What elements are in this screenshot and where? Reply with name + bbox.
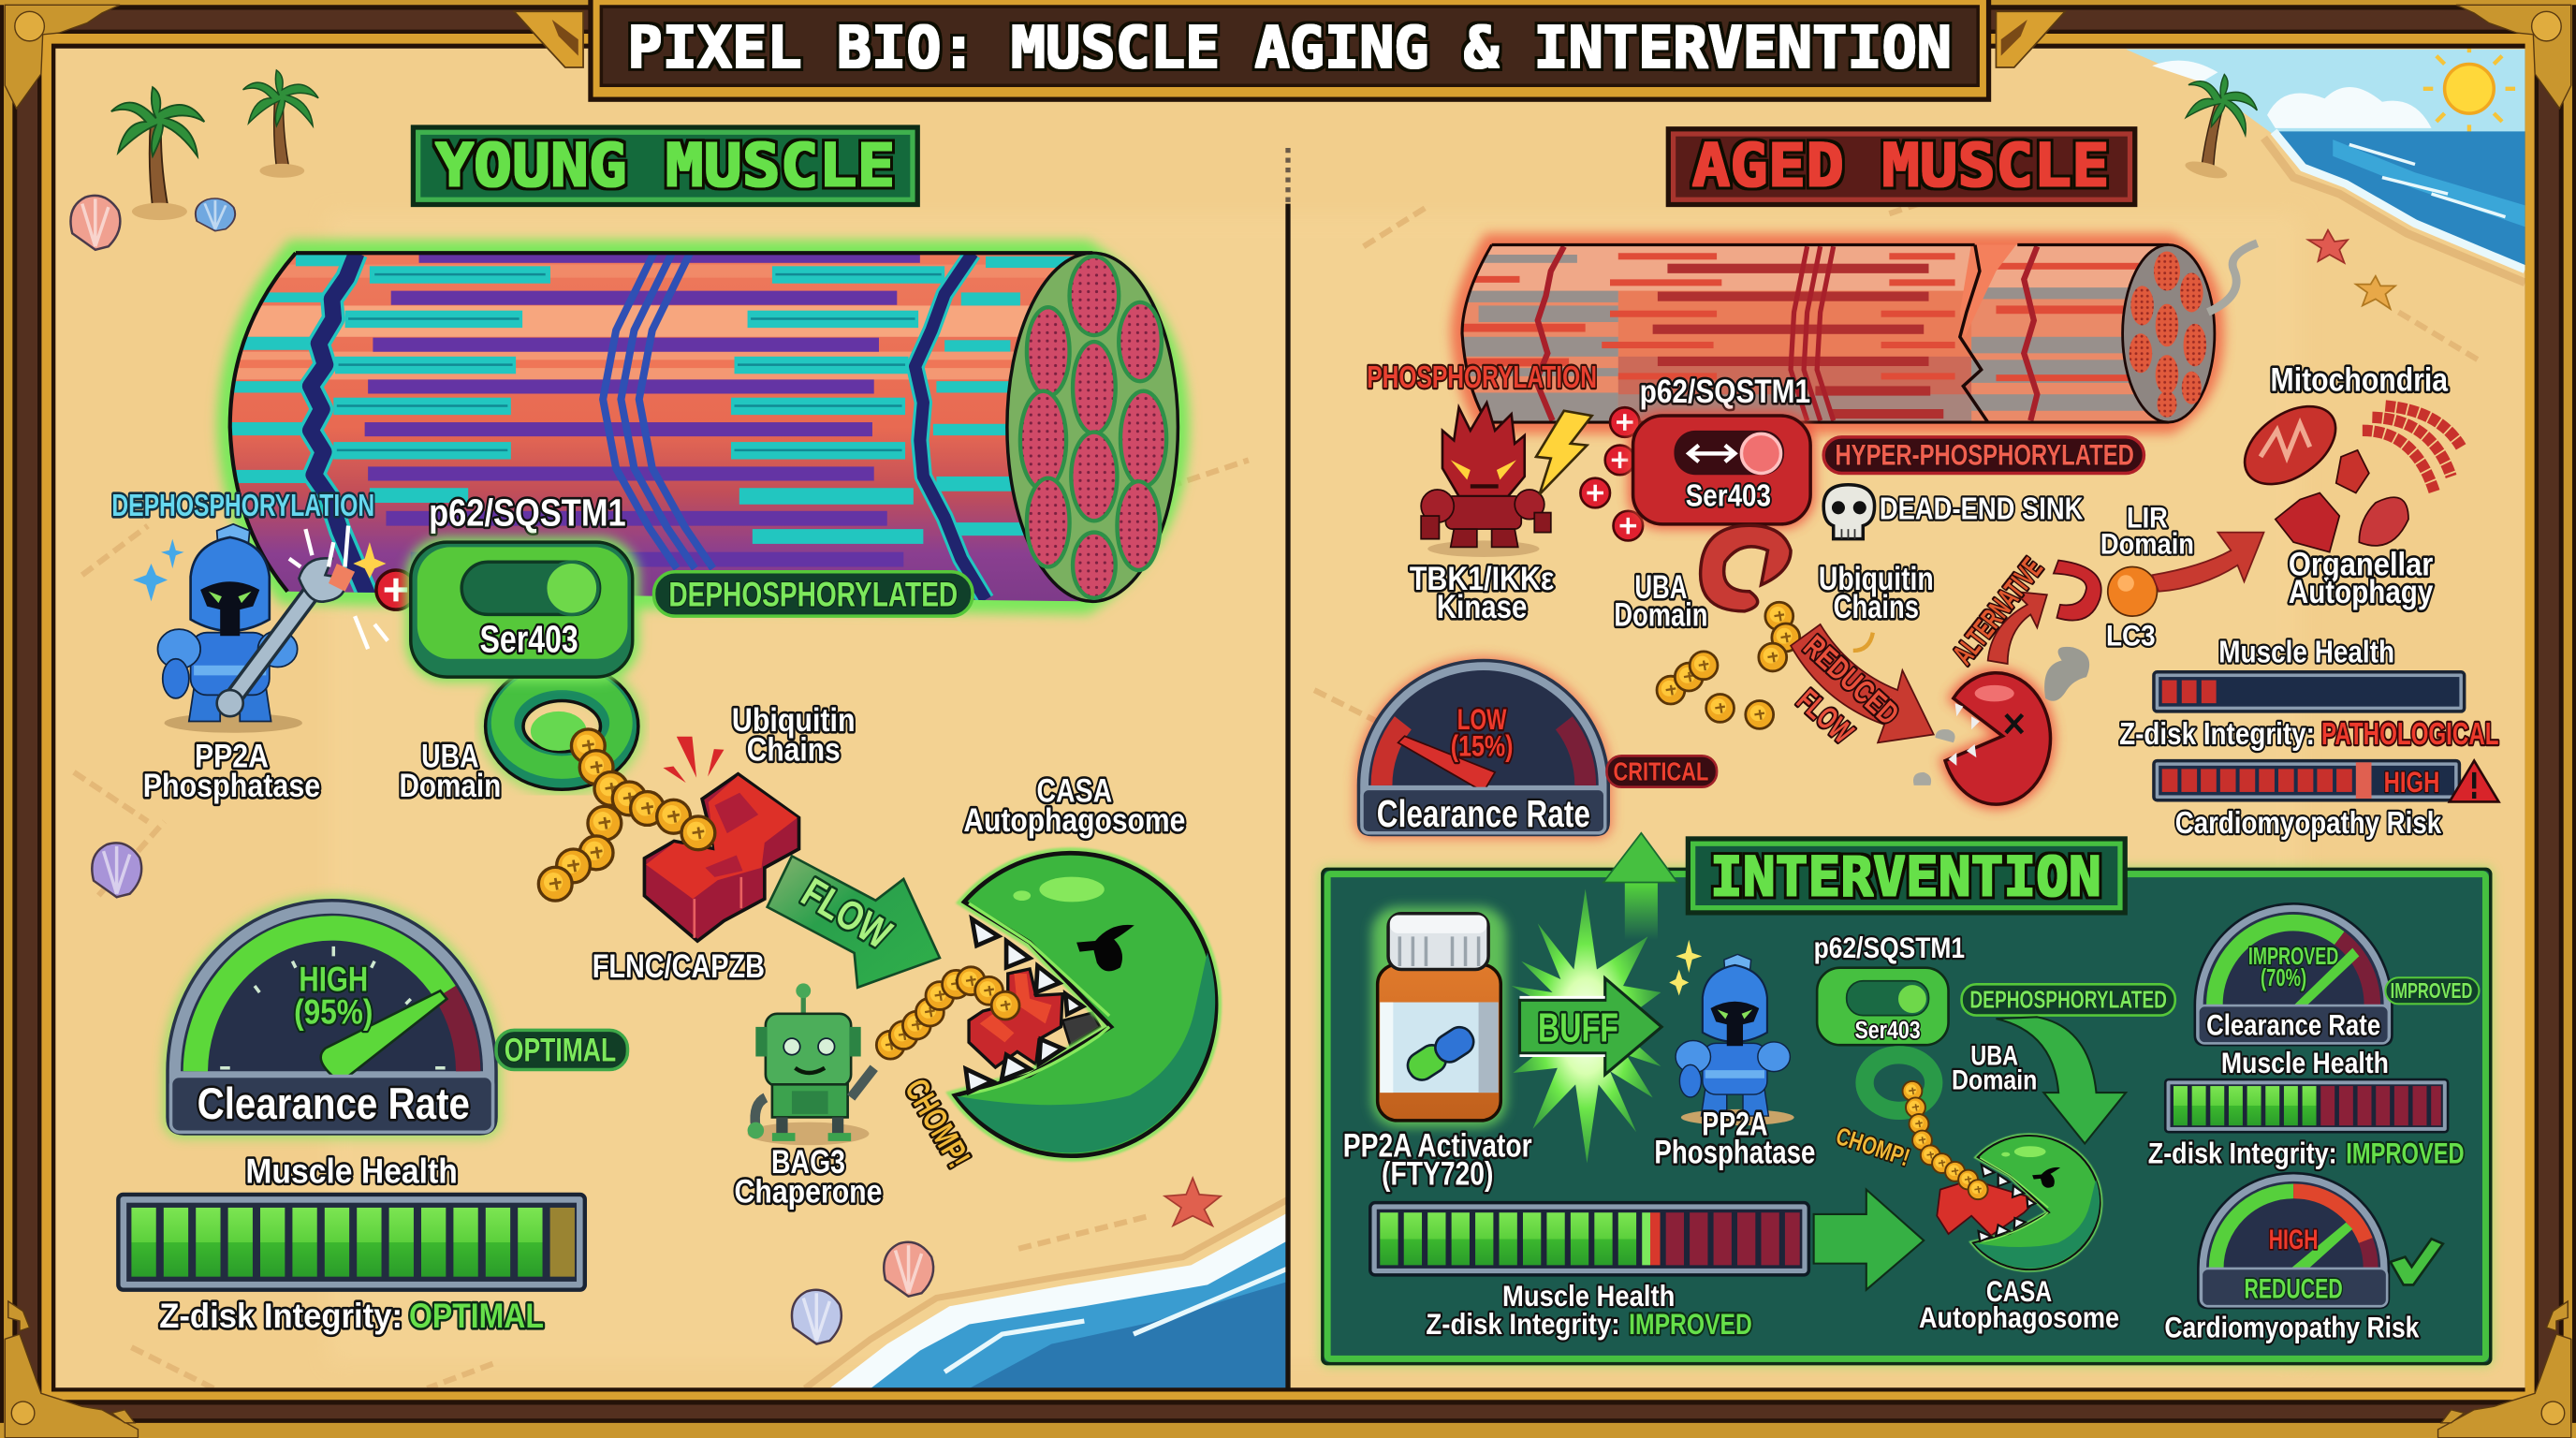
dead pac-man — [1913, 647, 2089, 804]
aged muscle fibre — [1454, 238, 2258, 427]
icon: TBK1 kinase monster — [1421, 403, 1592, 557]
label: organellar autophagy — [2289, 546, 2434, 610]
label: BAG3 chaperone: BAG3 — [771, 1144, 845, 1181]
pill: hyper-phosphorylated: HYPER-PHOSPHORYLATED — [1835, 438, 2134, 472]
UBA C-clamp — [1701, 525, 1791, 611]
sparkles — [133, 539, 184, 601]
label: z-disk integrity pathological: PATHOLOGICAL — [2321, 717, 2499, 752]
beach corner: sea bottom left — [805, 1199, 1288, 1388]
label: BAG3 chaperone: Chaperone — [735, 1174, 882, 1211]
arrow: alternative: ALTERNATIVE — [1946, 551, 2049, 670]
palm tree — [243, 70, 318, 178]
arrow: reduced flow: REDUCED — [1796, 629, 1905, 732]
palm tree — [111, 87, 204, 220]
label: chomp: CHOMP! — [898, 1073, 977, 1174]
arrow: reduced flow: FLOW — [1790, 683, 1860, 751]
arrow: flow: FLOW — [794, 870, 900, 958]
heading: aged muscle: AGED MUSCLE — [1692, 130, 2110, 199]
label: p62/SQSTM1: p62/SQSTM1 — [1640, 374, 1810, 410]
label: CASA autophagosome: Autophagosome — [1919, 1300, 2119, 1334]
small pac-man — [1973, 1136, 2100, 1269]
p62 switch: Ser403 — [1855, 1016, 1921, 1044]
label: PP2A activator: (FTY720) — [1382, 1155, 1493, 1192]
label: dephosphorylation: DEPHOSPHORYLATION — [111, 489, 374, 523]
label: z-disk integrity optimal: OPTIMAL — [409, 1297, 544, 1335]
panel: aged muscle — [1358, 126, 2499, 841]
lightning — [1536, 411, 1592, 494]
label: TBK1/IKKε kinase — [1410, 561, 1555, 625]
label: PP2A phosphatase: Phosphatase — [1654, 1135, 1815, 1171]
label: ubiquitin chains — [1819, 561, 1934, 625]
gauge value: LOW — [1457, 702, 1507, 736]
icon: BAG3 chaperone robot — [748, 983, 874, 1145]
gauge value: (95%) — [294, 992, 373, 1031]
label: UBA domain: UBA — [1970, 1040, 2018, 1071]
gauge: clearance rate high — [168, 901, 496, 1134]
LIR C-clamp and LC3 orb — [2054, 560, 2157, 621]
label: CASA autophagosome — [963, 772, 1185, 839]
icon: PP2A phosphatase knight with wrench — [133, 524, 388, 733]
label: muscle health: Muscle Health — [245, 1152, 458, 1191]
starfish — [2356, 276, 2395, 309]
label: BAG3 chaperone — [735, 1144, 882, 1211]
label: cardiomyopathy risk: Cardiomyopathy Risk — [2164, 1311, 2420, 1344]
p62 protein switch: Ser403 — [479, 618, 578, 661]
p62 protein switch — [406, 537, 639, 682]
label: ubiquitin chains: Ubiquitin — [1819, 561, 1934, 597]
label: CASA autophagosome: CASA — [1036, 772, 1112, 809]
shell — [884, 1242, 933, 1297]
muscle fibre cylinder — [213, 246, 1178, 608]
label: TBK1/IKKε kinase: Kinase — [1437, 589, 1527, 625]
p62 hyperphosphorylated switch — [1633, 416, 1810, 524]
smoke — [2208, 243, 2258, 312]
gauge bottom value: REDUCED — [2244, 1273, 2343, 1304]
starfish — [1164, 1178, 1221, 1225]
ubiquitin chain entering mouth — [876, 967, 1019, 1059]
ubiquitin chain — [1902, 1081, 1988, 1199]
label: z-disk integrity improved: Z-disk Integrity: — [2148, 1137, 2337, 1170]
icon: pill bottle — [1372, 907, 1506, 1127]
label: UBA domain: Domain — [1952, 1065, 2037, 1096]
label: chomp: CHOMP! — [1833, 1122, 1913, 1172]
label: PP2A activator: PP2A Activator — [1343, 1128, 1532, 1165]
icon: warning triangle — [2450, 761, 2499, 801]
title: PIXEL BIO: MUSCLE AGING & INTERVENTION — [627, 15, 1952, 81]
gauge value — [294, 960, 373, 1031]
label: muscle health: Muscle Health — [1502, 1279, 1675, 1313]
bar: improved muscle health — [2165, 1079, 2448, 1132]
sun — [2423, 43, 2515, 135]
label: PP2A activator — [1343, 1128, 1532, 1192]
label: ubiquitin chains: Chains — [747, 732, 841, 769]
impact marks — [663, 737, 724, 783]
icon: check mark — [2391, 1239, 2443, 1284]
label: UBA domain: UBA — [1634, 569, 1687, 606]
label: TBK1/IKKε kinase: TBK1/IKKε — [1410, 561, 1555, 597]
phosphate removed badge — [376, 570, 416, 609]
gauge value — [2248, 942, 2338, 991]
scattered ubiquitin — [1657, 602, 1873, 728]
gauge name: Clearance Rate — [198, 1079, 470, 1129]
shell — [92, 843, 141, 897]
label: ubiquitin chains: Chains — [1834, 589, 1919, 625]
label: cardiomyopathy risk: Cardiomyopathy Risk — [2175, 806, 2441, 841]
bar: cardiomyopathy risk high — [2154, 761, 2459, 800]
divider between young and aged — [1286, 148, 1290, 1390]
label: UBA domain — [1614, 569, 1707, 634]
bar: intervention muscle health — [1370, 1203, 1808, 1275]
FLNC/CAPZB red block — [644, 737, 799, 941]
arrow: alternative — [1946, 551, 2049, 670]
arrow: buff — [1519, 978, 1661, 1075]
arrow: intervention up — [1603, 833, 1677, 940]
gauge top value: HIGH — [2269, 1225, 2318, 1255]
smoke — [2044, 647, 2089, 701]
label: organellar autophagy: Organellar — [2289, 546, 2434, 582]
label: z-disk integrity optimal — [159, 1297, 544, 1335]
shell — [792, 1290, 842, 1344]
label: z-disk integrity improved — [1426, 1307, 1752, 1341]
pill: dephosphorylated — [1962, 984, 2175, 1016]
gauge value: IMPROVED — [2248, 942, 2338, 970]
shell — [70, 196, 120, 250]
label: UBA domain: Domain — [399, 768, 501, 804]
heading: intervention: INTERVENTION — [1710, 844, 2101, 908]
label: z-disk integrity improved: IMPROVED — [1629, 1307, 1752, 1341]
label: organellar autophagy: Autophagy — [2289, 574, 2434, 610]
bar: cardiomyopathy risk high: HIGH — [2384, 765, 2439, 799]
label: LIR domain — [2100, 500, 2194, 560]
label: CASA autophagosome — [1919, 1274, 2119, 1334]
beach corner: sea, sky and sun top right — [2126, 43, 2525, 309]
gauge value: HIGH — [299, 960, 368, 998]
label: LIR domain: LIR — [2127, 500, 2168, 534]
label: PP2A phosphatase — [1654, 1107, 1815, 1171]
FLNC/CAPZB block — [1937, 1180, 2037, 1236]
label: z-disk integrity improved: Z-disk Integrity: — [1426, 1307, 1620, 1341]
gauge value — [1451, 702, 1513, 762]
label: mitochondria: Mitochondria — [2271, 362, 2449, 399]
bar: muscle health — [118, 1195, 585, 1290]
label: LC3: LC3 — [2106, 619, 2156, 653]
gauge value: (15%) — [1451, 728, 1513, 762]
pill: dephosphorylated: DEPHOSPHORYLATED — [1969, 986, 2167, 1014]
shell — [196, 198, 235, 231]
label: PP2A phosphatase: PP2A — [1702, 1107, 1767, 1143]
label: PP2A phosphatase: PP2A — [195, 739, 269, 775]
label: z-disk integrity pathological — [2119, 717, 2499, 752]
label: muscle health: Muscle Health — [2218, 635, 2394, 669]
label: FLNC/CAPZB: FLNC/CAPZB — [593, 948, 765, 985]
label: phosphorylation: PHOSPHORYLATION — [1367, 360, 1597, 395]
starfish — [2308, 230, 2348, 263]
arrow: curved green — [1996, 1017, 2126, 1143]
label: p62/SQSTM1: p62/SQSTM1 — [429, 492, 626, 535]
pill: critical: CRITICAL — [1614, 757, 1708, 786]
p62 hyperphosphorylated switch: Ser403 — [1686, 479, 1771, 514]
label: LIR domain: Domain — [2100, 526, 2194, 560]
arrow: buff: BUFF — [1538, 1005, 1618, 1051]
label: z-disk integrity improved: IMPROVED — [2346, 1137, 2465, 1170]
gauge: clearance rate low — [1358, 661, 1608, 835]
icon: organelles — [2231, 390, 2461, 552]
CASA autophagosome pac-man — [955, 853, 1216, 1156]
bar: aged muscle health — [2154, 672, 2465, 712]
panel: young muscle — [111, 125, 1216, 1335]
effect: green burst — [1512, 888, 1661, 1164]
label: dead-end sink: DEAD-END SINK — [1880, 492, 2083, 527]
title plate — [514, 0, 2065, 102]
label: UBA domain — [1952, 1040, 2037, 1096]
ubiquitin chain — [538, 729, 715, 901]
label: CASA autophagosome: Autophagosome — [963, 802, 1185, 839]
heading: young muscle: YOUNG MUSCLE — [435, 130, 896, 199]
pill: optimal: OPTIMAL — [505, 1033, 616, 1069]
label: ubiquitin chains — [732, 702, 856, 769]
label: UBA domain: Domain — [1614, 597, 1707, 634]
label: UBA domain: UBA — [421, 739, 479, 775]
p62 switch — [1817, 968, 1949, 1045]
icon: skull — [1823, 485, 1875, 539]
palm tree — [2168, 66, 2263, 184]
gauge name: Clearance Rate — [2206, 1008, 2380, 1042]
panel: intervention — [1321, 833, 2492, 1365]
gauge value: (70%) — [2261, 963, 2306, 991]
arrow: flow — [768, 856, 940, 988]
pill: improved: IMPROVED — [2391, 978, 2472, 1003]
gauge: clearance rate improved — [2195, 903, 2392, 1045]
pill: dephosphorylated: DEPHOSPHORYLATED — [668, 576, 958, 614]
gauge name: Clearance Rate — [1377, 792, 1590, 835]
phosphate badges — [1580, 407, 1643, 540]
capsule — [1403, 1022, 1479, 1085]
sparkles — [1669, 940, 1702, 996]
pill: dephosphorylated — [654, 572, 973, 616]
label: PP2A phosphatase — [143, 739, 320, 804]
label: CASA autophagosome: CASA — [1986, 1274, 2052, 1308]
UBA domain ring — [500, 677, 624, 775]
gauge: cardiomyopathy risk reduced — [2198, 1173, 2389, 1308]
UBA ring — [1865, 1055, 1934, 1110]
arrow: to organellar autophagy — [2152, 533, 2264, 592]
label: p62/SQSTM1: p62/SQSTM1 — [1814, 931, 1965, 964]
arrow: bar to autophagosome — [1814, 1190, 1924, 1290]
label: PP2A phosphatase: Phosphatase — [143, 768, 320, 804]
icon: PP2A knight — [1676, 954, 1794, 1125]
label: z-disk integrity pathological: Z-disk Integrity: — [2119, 717, 2315, 752]
label: z-disk integrity optimal: Z-disk Integrity: — [159, 1297, 402, 1335]
label: muscle health: Muscle Health — [2221, 1046, 2389, 1079]
label: UBA domain — [399, 739, 501, 804]
label: ubiquitin chains: Ubiquitin — [732, 702, 856, 739]
